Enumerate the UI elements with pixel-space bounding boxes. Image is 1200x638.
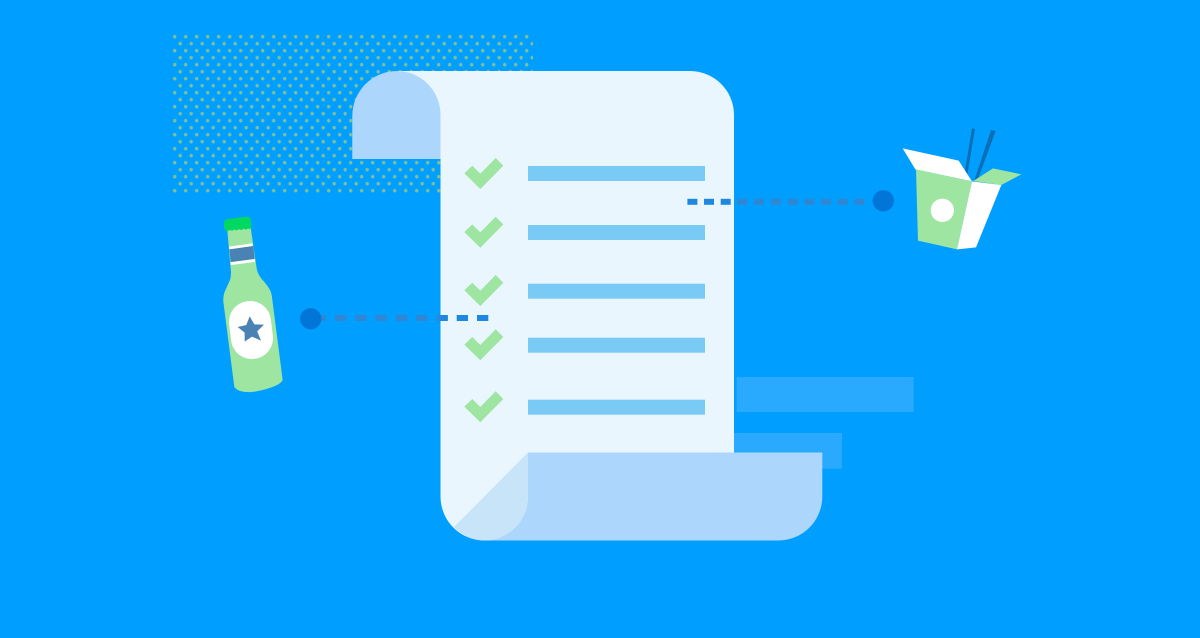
left flap xyxy=(903,148,972,181)
page fold xyxy=(454,452,528,540)
row 1 xyxy=(464,158,705,189)
bottle label xyxy=(227,299,275,361)
dashed connector: box to checklist xyxy=(687,190,894,212)
box side xyxy=(957,181,1001,249)
checklist rows xyxy=(464,158,705,422)
bottle cap xyxy=(224,217,252,231)
row 4 xyxy=(464,329,705,360)
paper scroll xyxy=(352,71,822,540)
row 5 xyxy=(464,391,705,422)
background bars behind scroll xyxy=(720,377,914,469)
bottle body xyxy=(223,228,283,392)
dotted pattern panel xyxy=(172,34,533,194)
box sticker xyxy=(931,199,954,222)
row 3 xyxy=(464,275,705,306)
scroll body xyxy=(397,71,734,540)
bottle neck band xyxy=(229,246,255,262)
chopsticks xyxy=(965,128,996,181)
top curl xyxy=(352,71,440,159)
icon: takeout box xyxy=(903,128,1021,249)
white neck stripes xyxy=(229,243,255,265)
row 2 xyxy=(464,217,705,248)
dashed connector: bottle to checklist xyxy=(300,308,488,329)
bottom curl xyxy=(484,452,822,540)
right flap xyxy=(973,168,1021,185)
icon: bottle xyxy=(223,217,283,392)
star xyxy=(238,316,264,342)
box front xyxy=(916,169,972,249)
